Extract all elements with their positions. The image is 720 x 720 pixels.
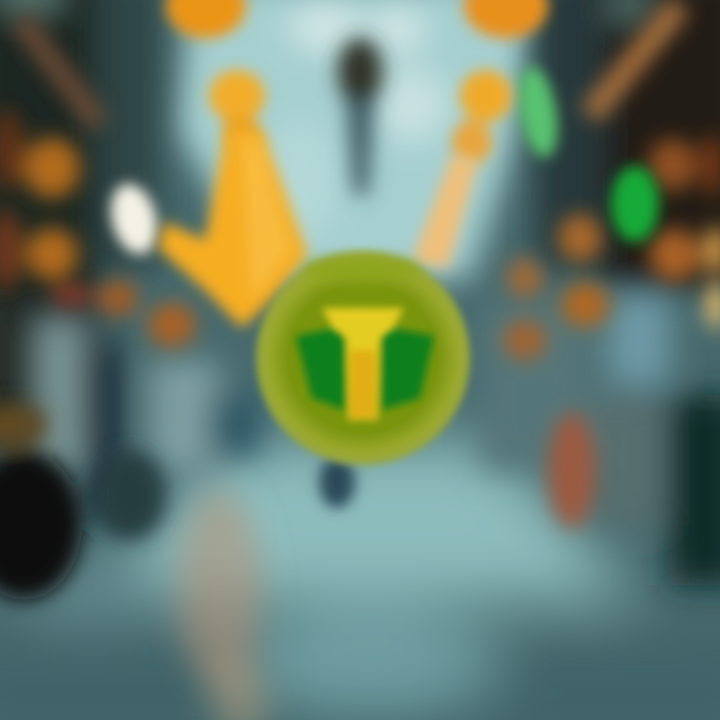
dark figure below emblem	[319, 456, 355, 508]
yellow T	[322, 308, 404, 420]
yellow tie: left	[158, 70, 308, 328]
emblem: green and yellow orb	[256, 251, 470, 465]
dark foreground objects	[0, 403, 596, 600]
orange lanterns: left side	[0, 110, 196, 347]
yellow tie: right	[412, 70, 512, 268]
white lamp	[103, 179, 165, 259]
left building wall	[0, 0, 260, 515]
sky: pale centre opening	[175, 0, 540, 280]
green lights	[512, 64, 659, 242]
ground reflections	[178, 490, 270, 720]
floor	[0, 440, 720, 720]
dark hanging figure	[338, 38, 382, 195]
left green panel	[296, 326, 345, 410]
right building wall	[480, 0, 720, 585]
right green panel	[382, 326, 434, 410]
top orange lanterns	[166, 0, 548, 38]
brown diagonal awnings	[20, 5, 680, 125]
orb body	[256, 251, 470, 465]
orange lanterns: right side	[503, 135, 720, 360]
orb rim highlight	[302, 258, 422, 282]
